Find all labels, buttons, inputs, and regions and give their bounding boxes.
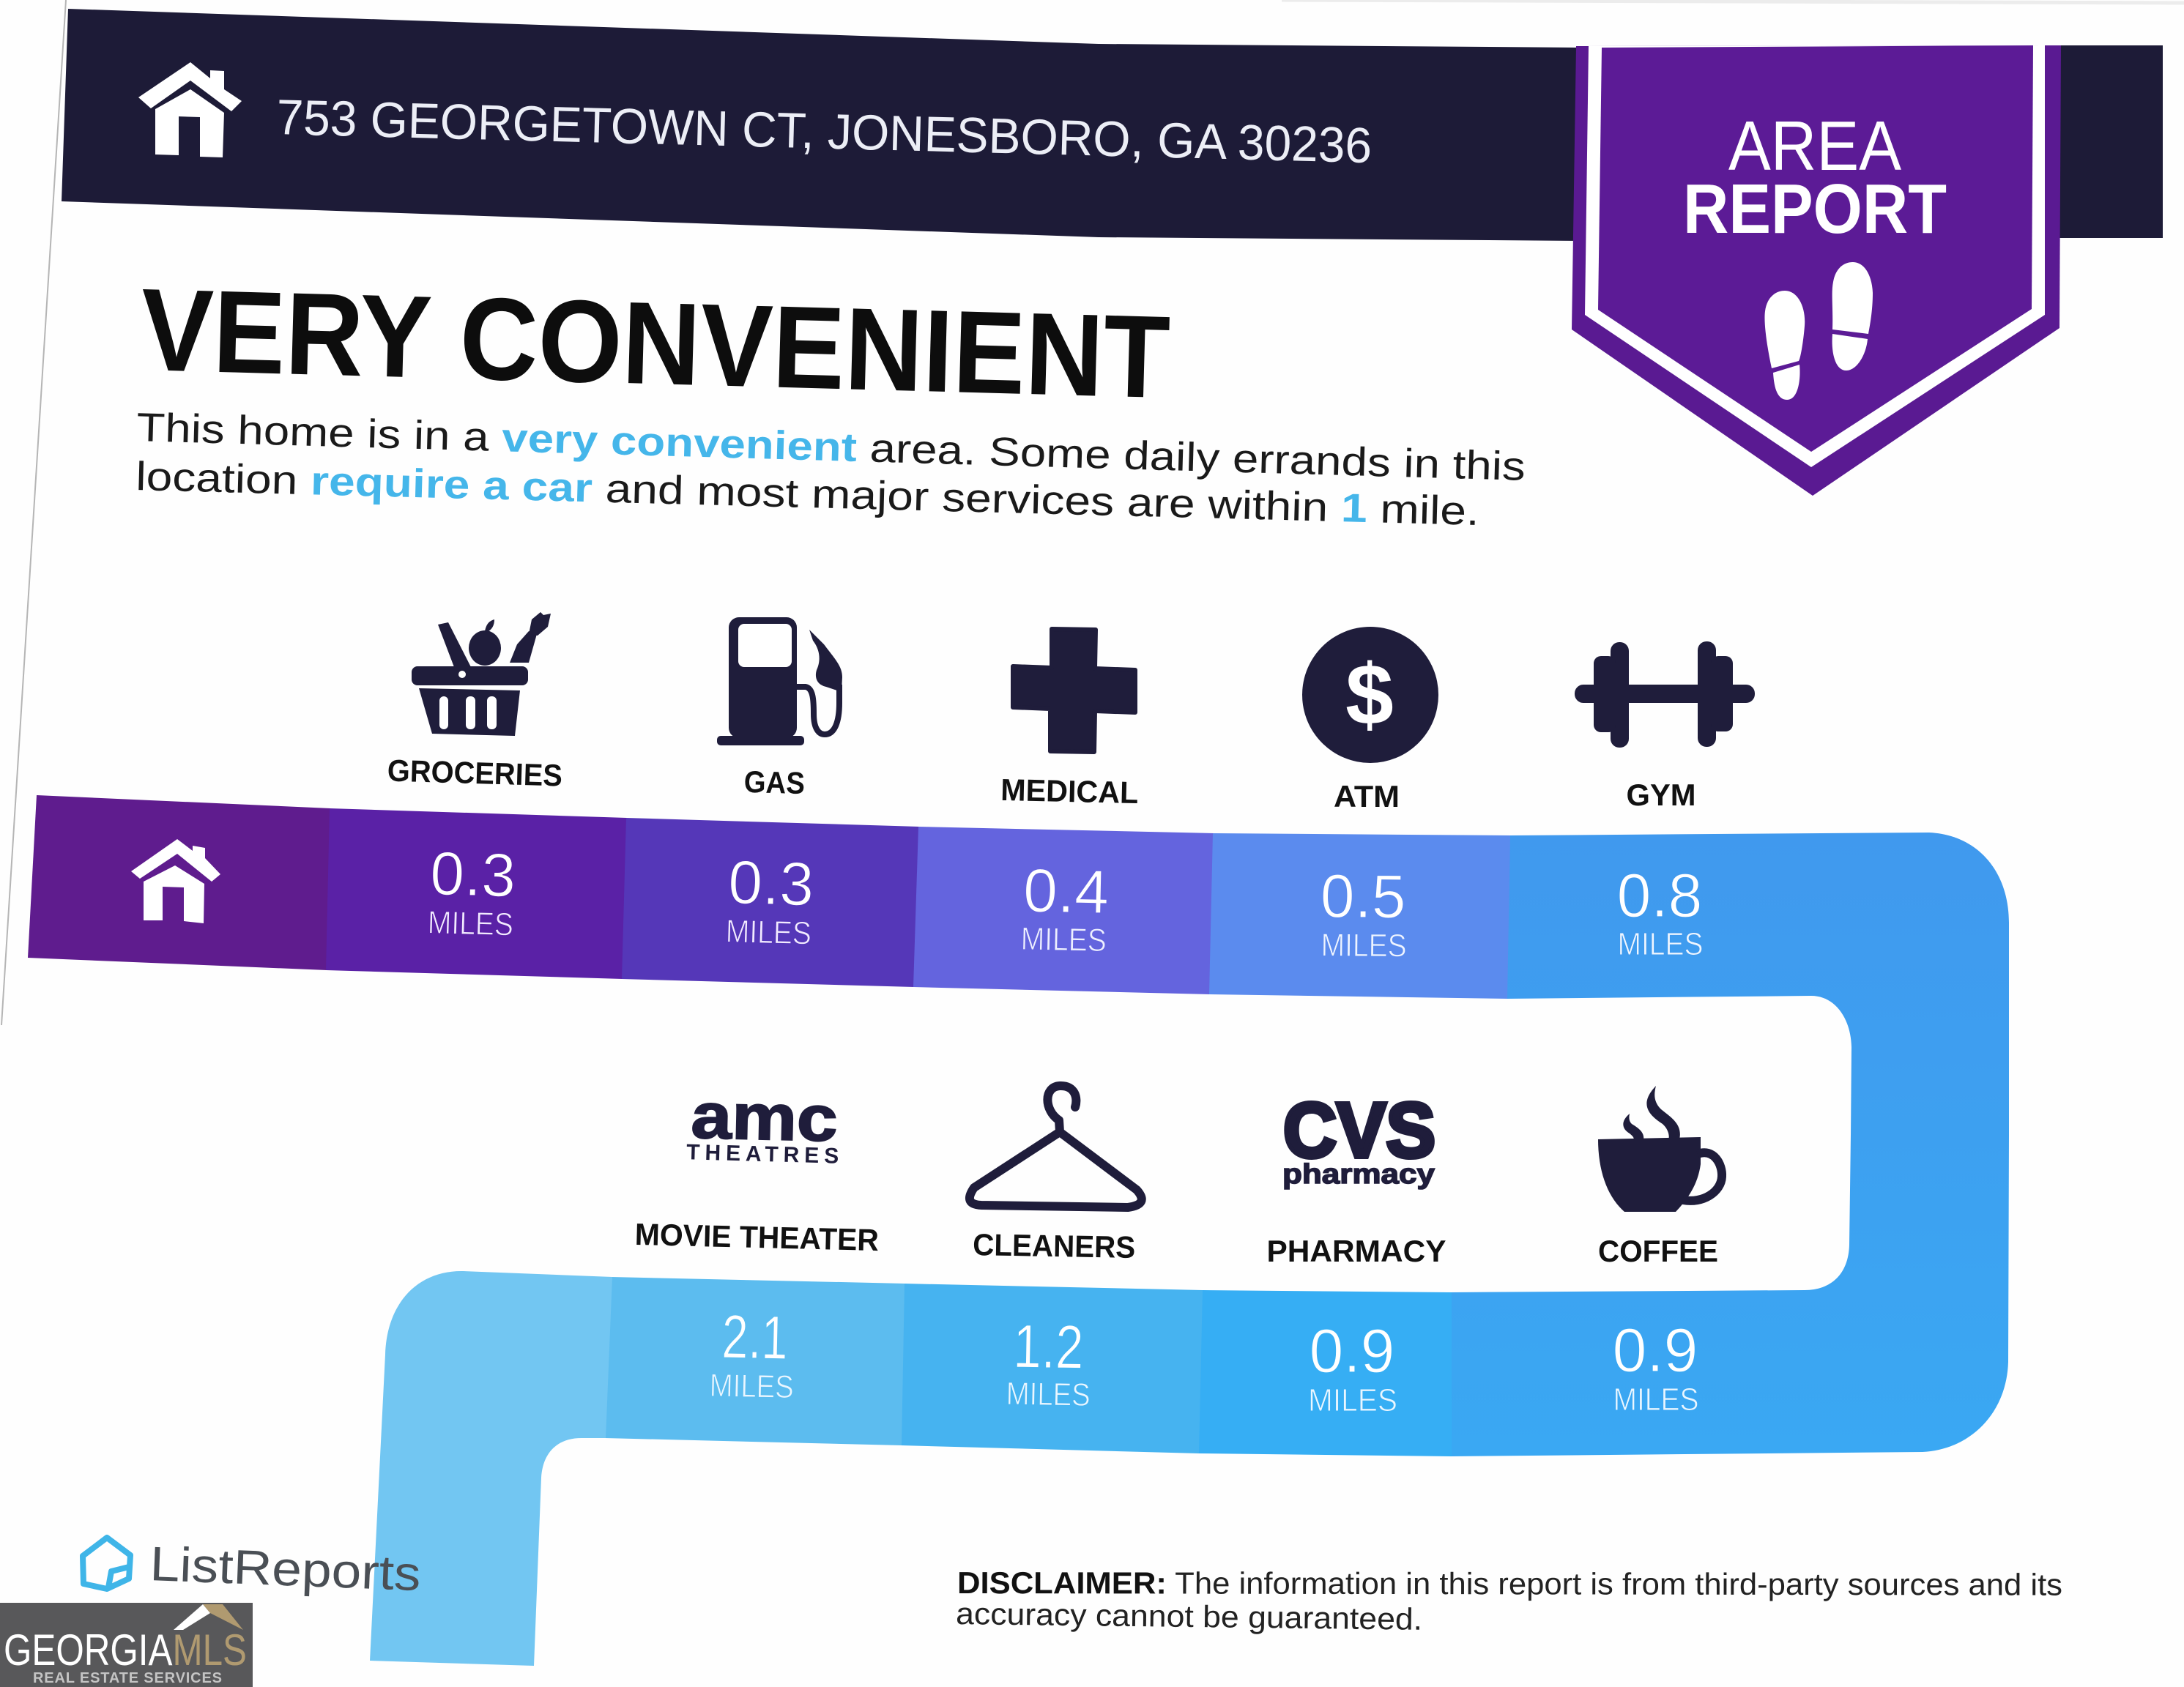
segment: home — [28, 795, 330, 970]
label: CLEANERS — [973, 1227, 1136, 1265]
segment: movie theater 2.1 — [605, 1277, 905, 1445]
ribbon: area report badge — [1572, 45, 2061, 496]
georgia mls badge — [0, 1603, 253, 1687]
segment: gym 0.8 and upper bend: MILES — [1617, 926, 1704, 962]
ribbon heading — [1683, 107, 1947, 248]
listreports logo — [83, 1536, 422, 1601]
label: COFFEE — [1598, 1234, 1718, 1268]
segment: pharmacy 0.9: 0.9 — [1310, 1317, 1394, 1385]
icon: roof — [174, 1604, 210, 1630]
label: GAS — [743, 764, 805, 800]
label: MOVIE THEATER — [634, 1217, 879, 1257]
segment: gas 0.3: MILES — [725, 913, 812, 952]
icon: dumbbell — [1575, 641, 1755, 748]
icon: footprints — [1764, 262, 1873, 400]
disclaimer: accuracy cannot be guaranteed. — [956, 1596, 1422, 1636]
icon: cvs pharmacy logo: pharmacy — [1282, 1159, 1435, 1190]
intro text: location require a car and most major services are within 1 mile. — [135, 453, 1480, 534]
icon: dollar coin — [1302, 627, 1438, 763]
label: ATM — [1334, 779, 1400, 813]
address text: 753 GEORGETOWN CT, JONESBORO, GA 30236 — [276, 89, 1373, 174]
item: groceries — [387, 612, 563, 793]
icon: fuel pump — [717, 617, 842, 745]
item: atm — [1302, 627, 1438, 813]
label: GYM — [1626, 778, 1696, 812]
item: medical — [1000, 629, 1139, 810]
segment: atm 0.5 — [1209, 833, 1511, 999]
wordmark: GEORGIAMLS — [4, 1625, 247, 1675]
segment: groceries 0.3 — [326, 808, 627, 979]
segment: atm 0.5: 0.5 — [1320, 861, 1406, 931]
tagline: REAL ESTATE SERVICES — [33, 1670, 222, 1686]
segment: medical 0.4: 0.4 — [1022, 856, 1110, 926]
wordmark: ListReports — [149, 1536, 422, 1601]
segment: gas 0.3: 0.3 — [727, 847, 814, 919]
icon: coffee cup — [1598, 1086, 1722, 1212]
icon: cross — [1013, 629, 1135, 752]
segment: coffee 0.9 and lower bend: 0.9 — [1613, 1316, 1698, 1385]
item: coffee — [1598, 1086, 1722, 1268]
item: gym — [1575, 641, 1755, 812]
segment: cleaners 1.2 — [901, 1284, 1203, 1453]
road: distance path — [28, 795, 2009, 1666]
icon: house — [138, 62, 242, 157]
item: cleaners — [970, 1086, 1142, 1265]
disclaimer — [956, 1565, 2062, 1636]
item: gas — [717, 617, 842, 800]
icon: cvs pharmacy logo: CVS — [1283, 1087, 1435, 1174]
label: PHARMACY — [1267, 1234, 1446, 1268]
segment: pharmacy 0.9: MILES — [1308, 1382, 1397, 1418]
title: VERY CONVENIENT — [139, 264, 1171, 422]
ribbon heading: REPORT — [1683, 170, 1947, 248]
segment: coffee 0.9 and lower bend — [1450, 1135, 2009, 1456]
icon: dollar coin: $ — [1345, 647, 1394, 743]
icon: home — [131, 839, 220, 923]
intro text — [135, 404, 1526, 534]
icon: amc theatres logo: THEATRES — [686, 1140, 839, 1169]
segment: medical 0.4: MILES — [1020, 921, 1107, 958]
icon: listreports mark — [83, 1538, 130, 1589]
segment: groceries 0.3: MILES — [427, 904, 514, 943]
label: MEDICAL — [1000, 772, 1139, 810]
icon: amc theatres logo: amc — [691, 1079, 839, 1155]
header band — [62, 9, 2163, 241]
label: GROCERIES — [387, 753, 563, 793]
item: pharmacy — [1267, 1087, 1446, 1268]
segment: movie theater 2.1: MILES — [709, 1368, 794, 1405]
segment: medical 0.4 — [913, 827, 1214, 994]
segment: cleaners 1.2: 1.2 — [1013, 1311, 1084, 1382]
segment: gym 0.8 and upper bend — [1507, 833, 2009, 1136]
segment: coffee 0.9 and lower bend: MILES — [1613, 1382, 1699, 1418]
segment: cleaners 1.2: MILES — [1006, 1376, 1091, 1413]
segment: movie theater 2.1: 2.1 — [721, 1302, 789, 1372]
segment: gym 0.8 and upper bend: 0.8 — [1617, 861, 1702, 930]
intro text: This home is in a very convenient area. Some daily errands in this — [136, 404, 1526, 489]
icon: basket — [412, 612, 551, 736]
icon: hanger — [970, 1086, 1142, 1207]
disclaimer: DISCLAIMER: The information in this report is from third-party sources and its — [957, 1565, 2062, 1602]
segment: groceries 0.3: 0.3 — [429, 838, 516, 910]
ribbon heading: AREA — [1728, 107, 1901, 185]
item: movie theater — [634, 1079, 879, 1257]
segment: gas 0.3 — [622, 818, 919, 987]
segment: atm 0.5: MILES — [1321, 927, 1407, 964]
segment: pharmacy 0.9 — [1198, 1290, 1452, 1456]
segment: road end — [370, 1271, 612, 1666]
